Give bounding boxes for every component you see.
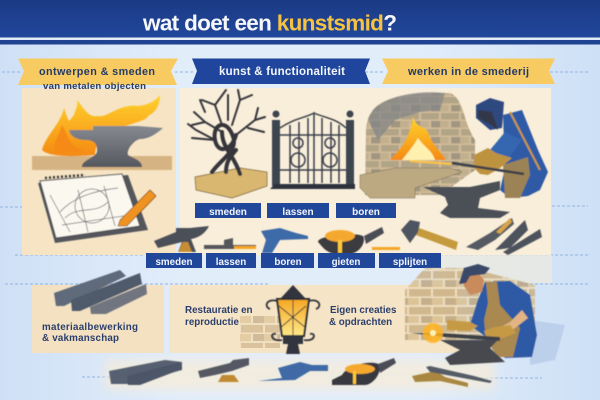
ribbon: werken in de smederij: werken in de smederij — [407, 66, 529, 78]
panel: lower center cream — [169, 285, 459, 353]
ribbon: werken in de smederij — [382, 58, 555, 84]
buttons: upper row: boren — [352, 207, 380, 218]
icon: lantern — [267, 273, 319, 354]
icon: forge with fire — [360, 92, 475, 198]
ribbon: ontwerpen — [18, 58, 178, 85]
tool icons row — [154, 218, 542, 255]
buttons: lower row: smeden — [155, 257, 193, 268]
text: eigen creaties en opdrachten: & opdrachten — [329, 317, 392, 328]
text: restauratie en reproductie: reproductie — [185, 317, 239, 328]
panel: center and right cream — [180, 88, 551, 255]
text: materiaalbewerking: & vakmanschap — [42, 333, 119, 344]
buttons: lower row: splijten — [393, 257, 427, 268]
icon: sketchbook and pencil — [38, 174, 156, 243]
header banner — [0, 0, 600, 44]
panel: faded area right of buttons — [440, 255, 552, 283]
text: restauratie en reproductie: Restauratie en — [185, 305, 253, 316]
dashed guides — [0, 72, 590, 378]
icon: brick wall behind blacksmith — [405, 268, 535, 340]
ghost bricks in lower panel — [240, 316, 280, 348]
icon: metal bars — [54, 270, 147, 314]
title: wat doet een kunstsmid? — [142, 10, 397, 36]
ribbon: kunst en functionaliteit: kunst & functionaliteit — [219, 66, 345, 78]
icon: anvil in smithy — [423, 181, 510, 218]
buttons: upper row: lassen — [282, 207, 314, 218]
panel: left cream — [22, 88, 176, 255]
icon: anvil with flames — [32, 95, 172, 170]
buttons: lower row: gieten — [332, 257, 360, 268]
ribbon: ontwerpen: ontwerpen & smeden — [39, 66, 155, 78]
text: eigen creaties en opdrachten: Eigen creaties — [330, 305, 397, 316]
icon: blacksmith with welding mask — [452, 98, 548, 198]
panel: lower left cream — [32, 285, 164, 353]
buttons: upper row — [195, 203, 396, 218]
text: materiaalbewerking: materiaalbewerking — [42, 322, 138, 333]
bottom tool row — [109, 358, 492, 387]
text: van metalen objecten: van metalen objecten — [43, 81, 146, 92]
wash behind lower tools — [105, 360, 495, 390]
buttons: upper row: smeden — [209, 207, 247, 218]
icon: wrought iron gate — [270, 110, 355, 189]
icon: metal tree on stone — [188, 90, 267, 198]
buttons: lower row: boren — [274, 257, 302, 268]
buttons: lower row: lassen — [216, 257, 246, 268]
ribbon: kunst en functionaliteit — [192, 58, 370, 84]
icon: blacksmith at anvil — [410, 264, 565, 365]
buttons: lower row — [146, 253, 441, 268]
